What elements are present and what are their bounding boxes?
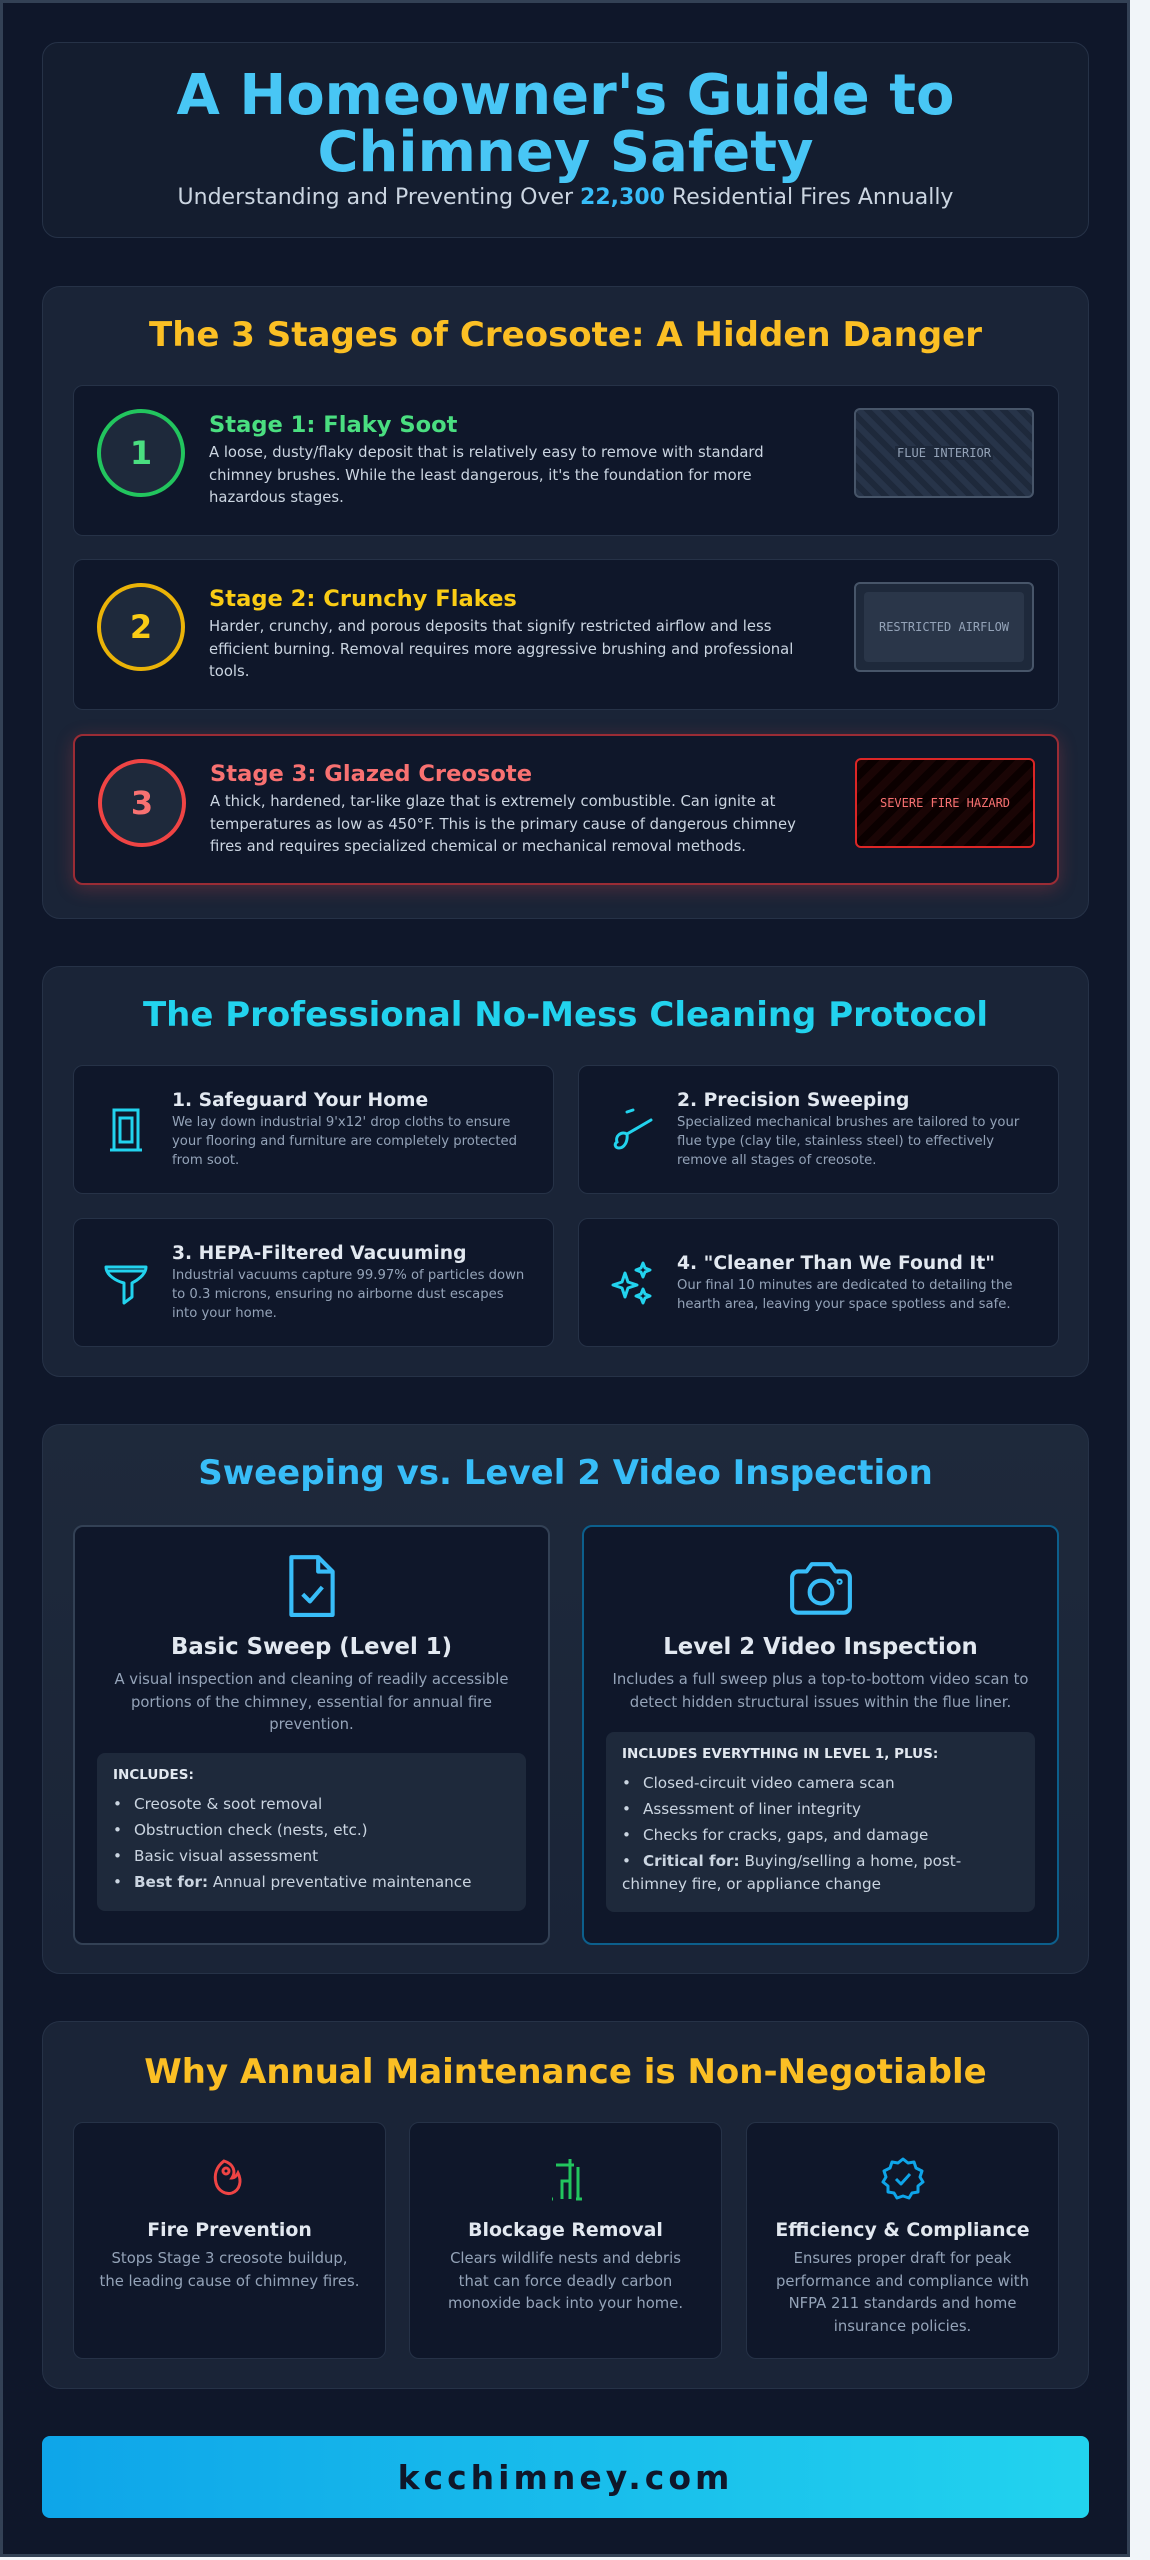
step 4 <box>578 1218 1059 1347</box>
stage 2 text: Harder, crunchy, and porous deposits that signify restricted airflow and less efficient burning. Removal requires more aggressive brushing and professional tools. <box>209 618 793 680</box>
step 3: Industrial vacuums capture 99.97% of particles down to 0.3 microns, ensuring no airborne dust escapes into your home. <box>172 1268 524 1321</box>
stage 3 text: A thick, hardened, tar-like glaze that is extremely combustible. Can ignite at temperatures as low as 450°F. This is the primary cause of dangerous chimney fires and requires specialized chemical or mechanical removal methods. <box>210 793 796 855</box>
card: fire prevention <box>73 2122 386 2359</box>
card: efficiency: Efficiency & Compliance <box>775 2219 1030 2241</box>
heading: comparison: Sweeping vs. Level 2 Video Inspection <box>198 1453 933 1493</box>
image: restricted airflow <box>854 582 1034 672</box>
card: level 2 <box>582 1525 1059 1945</box>
circle 3: 3 <box>131 784 153 822</box>
circle 1 <box>97 409 185 497</box>
image: restricted airflow: RESTRICTED AIRFLOW <box>879 620 1009 634</box>
card: level 2: Includes a full sweep plus a top-to-bottom video scan to detect hidden structural issues within the flue liner. <box>612 1671 1028 1710</box>
step 3: 3. HEPA-Filtered Vacuuming <box>172 1243 466 1264</box>
step 1: We lay down industrial 9'x12' drop cloths to ensure your flooring and furniture are completely protected from soot. <box>172 1115 517 1168</box>
stage 1 card <box>73 385 1059 536</box>
includes list level 2: Assessment of liner integrity <box>643 1800 861 1818</box>
panel: creosote stages <box>42 286 1089 919</box>
icon: door <box>110 1108 142 1152</box>
header card <box>42 42 1089 238</box>
image: fire hazard <box>855 758 1035 848</box>
includes list: INCLUDES: <box>113 1766 194 1782</box>
step 2: 2. Precision Sweeping <box>677 1090 909 1111</box>
panel: sweep vs inspection <box>42 1424 1089 1974</box>
includes list level 2: Closed-circuit video camera scan <box>643 1774 895 1792</box>
includes list: Obstruction check (nests, etc.) <box>134 1820 368 1838</box>
card: efficiency: Ensures proper draft for peak performance and compliance with NFPA 211 standards and home insurance policies. <box>776 2250 1029 2334</box>
step 2: Specialized mechanical brushes are tailored to your flue type (clay tile, stainless steel) to effectively remove all stages of creosote. <box>677 1115 1019 1168</box>
heading: stages: The 3 Stages of Creosote: A Hidden Danger <box>149 315 982 355</box>
stage 1 text: Stage 1: Flaky Soot <box>209 412 457 438</box>
stage 3 text <box>210 761 796 855</box>
includes list: Creosote & soot removal <box>134 1794 322 1812</box>
panel: cleaning protocol <box>42 966 1089 1377</box>
card: blockage removal <box>409 2122 722 2359</box>
stage 1 text <box>209 412 764 506</box>
icon: camera <box>790 1562 852 1615</box>
subtitle: Understanding and Preventing Over 22,300 Residential Fires Annually <box>178 185 953 210</box>
stage 3 text: Stage 3: Glazed Creosote <box>210 761 532 787</box>
icon: filter funnel <box>104 1266 148 1305</box>
title: Chimney Safety <box>317 120 814 185</box>
card: basic sweep: A visual inspection and cleaning of readily accessible portions of the chimney, essential for annual fire prevention. <box>114 1671 508 1733</box>
icon: brush <box>614 1108 653 1150</box>
icon: file check <box>289 1555 335 1617</box>
icon: flame <box>214 2159 242 2196</box>
stage 2 text: Stage 2: Crunchy Flakes <box>209 586 517 612</box>
panel: annual maintenance <box>42 2021 1089 2389</box>
icon: badge check <box>882 2158 924 2200</box>
step 2 <box>578 1065 1059 1194</box>
circle 2 <box>97 583 185 671</box>
includes list level 2: INCLUDES EVERYTHING IN LEVEL 1, PLUS: <box>622 1746 938 1762</box>
includes list level 2: Checks for cracks, gaps, and damage <box>643 1826 928 1844</box>
card: level 2: Level 2 Video Inspection <box>663 1634 978 1660</box>
card: efficiency <box>746 2122 1059 2359</box>
footer banner: kcchimney.com <box>398 2458 733 2496</box>
card: basic sweep <box>73 1525 550 1945</box>
card: blockage removal: Blockage Removal <box>468 2219 663 2241</box>
heading: why: Why Annual Maintenance is Non-Negotiable <box>144 2052 987 2092</box>
card: basic sweep: Basic Sweep (Level 1) <box>171 1634 452 1660</box>
card: blockage removal: Clears wildlife nests and debris that can force deadly carbon monoxide back into your home. <box>448 2250 683 2312</box>
circle 1: 1 <box>130 434 152 472</box>
step 3 <box>73 1218 554 1347</box>
title <box>176 63 954 185</box>
step 4: 4. "Cleaner Than We Found It" <box>677 1252 995 1274</box>
icon: sparkles <box>612 1262 652 1304</box>
step 4: Our final 10 minutes are dedicated to detailing the hearth area, leaving your space spotless and safe. <box>677 1278 1012 1312</box>
stage 2 text <box>209 586 793 680</box>
icon: chimney blockage <box>552 2159 582 2200</box>
circle 2: 2 <box>130 608 152 646</box>
includes list level 2: Critical for: Buying/selling a home, post-​chimney fire, or appliance change <box>622 1852 961 1893</box>
image: fire hazard: SEVERE FIRE HAZARD <box>880 796 1010 810</box>
step 1: 1. Safeguard Your Home <box>172 1090 428 1111</box>
card: fire prevention: Stops Stage 3 creosote buildup, the leading cause of chimney fires. <box>100 2250 359 2290</box>
title: A Homeowner's Guide to <box>176 63 954 128</box>
stage 3 card <box>73 734 1059 885</box>
step 1 <box>73 1065 554 1194</box>
includes list <box>97 1752 526 1910</box>
image: flue interior <box>854 408 1034 498</box>
heading: protocol: The Professional No-Mess Cleaning Protocol <box>143 995 988 1035</box>
includes list level 2 <box>606 1732 1035 1912</box>
stage 1 text: A loose, dusty/flaky deposit that is relatively easy to remove with standard chimney brushes. While the least dangerous, it's the foundation for more hazardous stages. <box>209 444 764 506</box>
includes list: Basic visual assessment <box>134 1846 318 1864</box>
image: flue interior: FLUE INTERIOR <box>897 446 991 460</box>
circle 3 <box>98 759 186 847</box>
card: fire prevention: Fire Prevention <box>147 2219 312 2241</box>
stage 2 card <box>73 559 1059 710</box>
footer banner <box>42 2436 1089 2518</box>
includes list: Best for: Annual preventative maintenance <box>134 1872 471 1890</box>
